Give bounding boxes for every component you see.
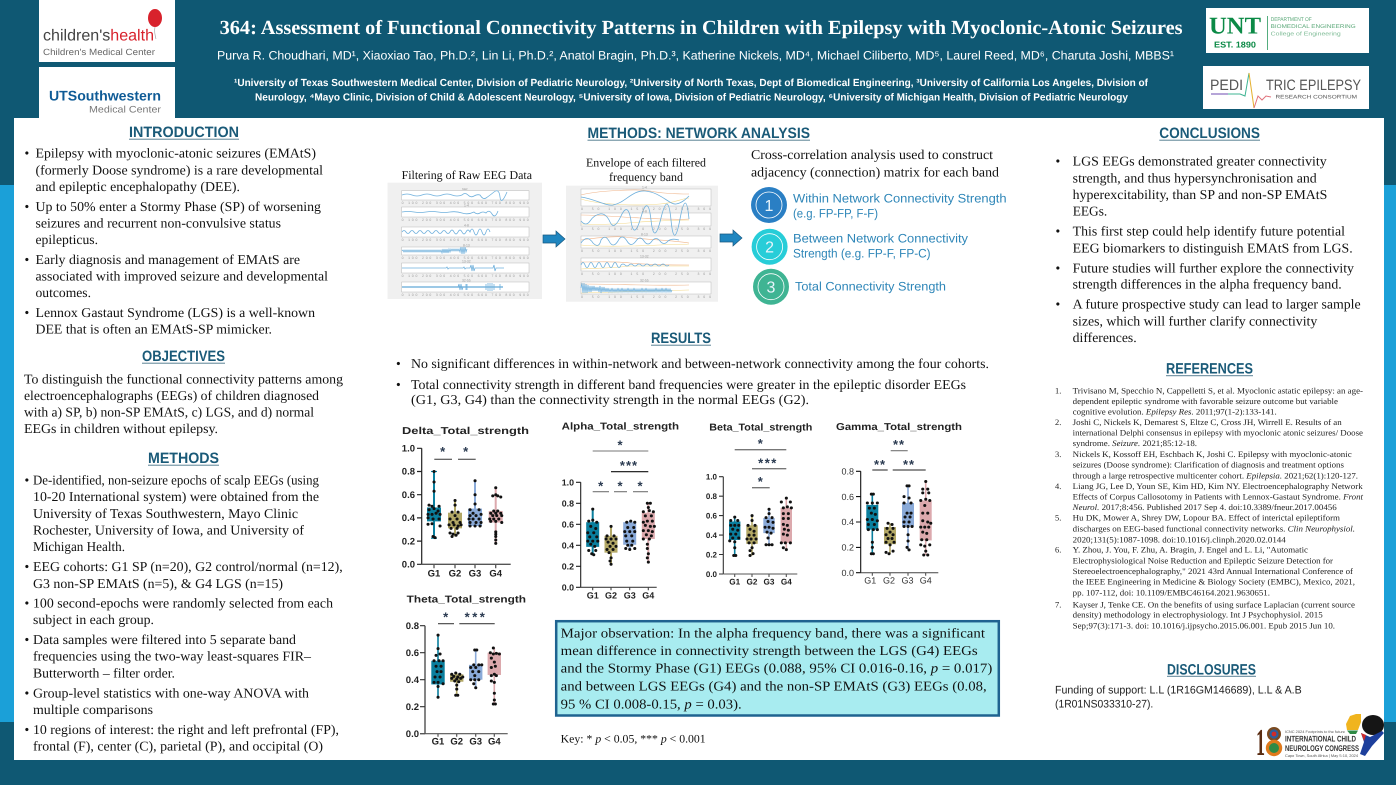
box G4 bbox=[488, 648, 501, 704]
panel: conclusions bbox=[1056, 125, 1361, 345]
logo: International Child Neurology Congress: ICNC 2024 Footprints to the future bbox=[1285, 730, 1345, 734]
chart: alpha total strength: 0.8 bbox=[562, 498, 574, 508]
results bullets: Total connectivity strength in different band frequencies were greater in the epileptic disorder EEGs bbox=[411, 377, 966, 392]
logo: UT Southwestern: UTSouthwestern bbox=[49, 88, 161, 104]
reference list: Sep;97(3):171-3. doi: 10.1016/j.ijpsycho.2015.06.001. Epub 2015 Jun 10. bbox=[1073, 621, 1335, 630]
panel: objectives bbox=[24, 348, 343, 436]
methods bullets: • bbox=[24, 722, 29, 737]
chart: theta total strength: Theta_Total_strength bbox=[407, 594, 526, 605]
methods bullets: • bbox=[24, 559, 29, 574]
panel: methods network analysis bbox=[388, 125, 1007, 305]
heading: introduction: INTRODUCTION bbox=[129, 124, 239, 141]
results bullets: No significant differences in within-network and between-network connectivity among the four cohorts. bbox=[411, 356, 989, 371]
conclusions bullets: • bbox=[1056, 224, 1060, 239]
chart: theta total strength: 0.6 bbox=[406, 648, 419, 659]
chart: filtered raw EEG traces: 32-55 bbox=[462, 278, 471, 282]
chart: delta total strength: G1 bbox=[428, 569, 441, 580]
funding text: Funding of support: L.L (1R16GM146689), L.L & A.B bbox=[1055, 684, 1302, 696]
conclusions bullets: differences. bbox=[1073, 330, 1137, 345]
reference list: 4. bbox=[1055, 482, 1061, 491]
chart: theta total strength: G4 bbox=[488, 737, 501, 748]
chart: theta total strength: G3 bbox=[469, 737, 482, 748]
affiliations bbox=[234, 78, 1149, 104]
logo: UNT: UNT bbox=[1209, 13, 1261, 39]
chart: gamma total strength: 0.6 bbox=[841, 492, 854, 502]
heading: methods network analysis: METHODS: NETWORK ANALYSIS bbox=[588, 125, 810, 142]
intro bullets: and epileptic encephalopathy (DEE). bbox=[36, 179, 240, 194]
chart: alpha total strength: *** bbox=[620, 458, 638, 473]
callout: major observation: 95 % CI 0.008-0.15, p = 0.03). bbox=[561, 696, 742, 711]
chart: envelope of each band: 4-8 bbox=[642, 210, 647, 214]
chart: alpha total strength: 0.2 bbox=[562, 561, 574, 571]
chart: theta total strength: G2 bbox=[450, 737, 463, 748]
reference list: 7. bbox=[1055, 600, 1061, 609]
methods bullets: • bbox=[24, 686, 29, 701]
chart: beta total strength: *** bbox=[758, 456, 778, 470]
box G1 bbox=[729, 517, 740, 556]
reference list: the IEEE Engineering in Medicine & Biology Society (EMBC), Mexico, 2021, bbox=[1073, 578, 1355, 587]
chart: delta total strength: G2 bbox=[449, 569, 461, 580]
reference list: 3. bbox=[1055, 450, 1061, 459]
conclusions bullets: A future prospective study can lead to larger sample bbox=[1073, 297, 1361, 312]
chart: beta total strength: 0.6 bbox=[706, 511, 718, 520]
box G1 bbox=[427, 471, 441, 539]
reference list: through a large retrospective multicenter cohort. Epilepsia. 2021;62(1):120-127. bbox=[1073, 471, 1358, 480]
item 2: between network: 2 bbox=[765, 240, 774, 257]
methods bullets: Michigan Health. bbox=[33, 539, 125, 554]
methods bullets: frontal (F), center (C), parietal (P), and occipital (O) bbox=[33, 739, 323, 754]
conclusions bullets: EEGs. bbox=[1073, 204, 1107, 219]
chart: beta total strength bbox=[706, 423, 812, 587]
logo: Children's Health bbox=[39, 0, 175, 62]
chart: delta total strength: 1.0 bbox=[402, 444, 415, 454]
chart: alpha total strength: * bbox=[598, 478, 604, 494]
heading: objectives: OBJECTIVES bbox=[142, 348, 225, 365]
panel: results bbox=[396, 330, 999, 748]
intro bullets: Epilepsy with myoclonic-atonic seizures (EMAtS) bbox=[36, 146, 316, 161]
methods bullets: frequencies using the two-way least-squares FIR– bbox=[33, 649, 311, 664]
methods bullets: G3 non-SP EMAtS (n=5), & G4 LGS (n=15) bbox=[33, 576, 283, 591]
logo: UNT: College of Engineering bbox=[1271, 30, 1341, 37]
item 1: within network: Within Network Connectivity Strength bbox=[793, 192, 1007, 206]
chart: beta total strength: 0.0 bbox=[706, 570, 718, 579]
caption: envelope: Envelope of each filtered bbox=[586, 156, 706, 170]
methods bullets: subject in each group. bbox=[33, 612, 154, 627]
methods bullets: University of Texas Southwestern, Mayo Clinic bbox=[33, 506, 298, 521]
box G2 bbox=[448, 500, 462, 536]
chart: envelope of each band: 0 50 100 150 200 250 300 bbox=[581, 207, 711, 211]
conclusions bullets: This first step could help identify future potential bbox=[1073, 224, 1345, 239]
chart: gamma total strength: ** bbox=[874, 457, 886, 472]
chart: delta total strength: 0.6 bbox=[402, 490, 415, 501]
chart: gamma total strength: G3 bbox=[901, 575, 914, 585]
reference list: 6. bbox=[1055, 546, 1061, 555]
caption: filtering: Filtering of Raw EEG Data bbox=[402, 168, 533, 182]
intro bullets: outcomes. bbox=[36, 285, 91, 300]
chart: gamma total strength: 0.8 bbox=[841, 466, 854, 476]
caption: cross-correlation: Cross-correlation analysis used to construct bbox=[751, 147, 993, 162]
chart: envelope of each band bbox=[566, 186, 718, 302]
chart: beta total strength: G1 bbox=[729, 578, 741, 587]
intro bullets: epilepticus. bbox=[36, 232, 98, 247]
chart: gamma total strength: 0.2 bbox=[841, 543, 854, 553]
chart: delta total strength: * bbox=[440, 444, 446, 459]
chart: alpha total strength: 1.0 bbox=[562, 477, 574, 487]
results bullets: • bbox=[396, 377, 401, 392]
box G1 bbox=[431, 635, 445, 697]
chart: beta total strength: 0.2 bbox=[706, 550, 718, 559]
reference list: Neurol. 2017;8:456. Published 2017 Sep 4. doi:10.3389/fneur.2017.00456 bbox=[1072, 503, 1337, 512]
item 3: total connectivity bbox=[753, 269, 946, 305]
chart: beta total strength: * bbox=[758, 474, 764, 489]
reference list: 5. bbox=[1055, 514, 1061, 523]
conclusions bullets: EEG biomarkers to distinguish EMAtS from LGS. bbox=[1073, 240, 1353, 255]
chart: gamma total strength: G4 bbox=[920, 575, 932, 585]
chart: gamma total strength bbox=[836, 422, 962, 585]
logo: International Child Neurology Congress: NEUROLOGY CONGRESS bbox=[1285, 744, 1359, 753]
logo: International Child Neurology Congress: 1 bbox=[1256, 722, 1265, 764]
intro bullets: • bbox=[24, 305, 29, 320]
conclusions bullets: sizes, which will further clarify connectivity bbox=[1073, 313, 1318, 328]
conclusions bullets: strength differences in the alpha frequency band. bbox=[1073, 277, 1342, 292]
chart: alpha total strength: G2 bbox=[605, 591, 617, 601]
chart: beta total strength: 0.4 bbox=[706, 531, 718, 540]
reference list: Liang JG, Lee D, Youn SE, Kim HD, Kim NY. Electroencephalography Network bbox=[1073, 482, 1364, 491]
chart: envelope of each band: 0 50 100 150 200 250 300 bbox=[581, 272, 711, 276]
reference list: syndrome. Seizure. 2021;85:12-18. bbox=[1073, 439, 1197, 448]
logo: Children's Health: children'shealth bbox=[43, 28, 154, 45]
chart: filtered raw EEG traces bbox=[388, 183, 542, 299]
box G3 bbox=[902, 486, 914, 550]
box G2 bbox=[884, 523, 896, 554]
chart: filtered raw EEG traces: 0 100 200 300 400 500 600 700 800 900 bbox=[402, 238, 529, 242]
chart: filtered raw EEG traces: 0 100 200 300 400 500 600 700 800 900 bbox=[402, 218, 529, 222]
logo: International Child Neurology Congress: INTERNATIONAL CHILD bbox=[1285, 735, 1356, 744]
chart: alpha total strength bbox=[562, 421, 679, 601]
intro bullets: Early diagnosis and management of EMAtS are bbox=[36, 252, 300, 267]
chart: alpha total strength: G1 bbox=[587, 591, 599, 601]
chart: delta total strength: 0.2 bbox=[402, 536, 415, 547]
logo: International Child Neurology Congress bbox=[1256, 714, 1384, 764]
results bullets: (G1, G3, G4) than the connectivity strength in the normal EEGs (G2). bbox=[411, 392, 809, 407]
chart: theta total strength: 0.8 bbox=[406, 621, 419, 632]
logo: Pediatric Epilepsy Research Consortium: TRIC EPILEPSY bbox=[1266, 77, 1361, 94]
heading: references: REFERENCES bbox=[1166, 361, 1253, 378]
chart: filtered raw EEG traces: 1-4 bbox=[464, 204, 469, 208]
caption: envelope bbox=[586, 156, 706, 184]
chart: filtered raw EEG traces: 4-8 bbox=[464, 224, 469, 228]
chart: delta total strength bbox=[402, 426, 529, 580]
conclusions bullets: Future studies will further explore the connectivity bbox=[1073, 260, 1354, 275]
chart: theta total strength: G1 bbox=[432, 737, 445, 748]
caption: cross-correlation bbox=[751, 147, 999, 180]
logo: UNT: EST. 1890 bbox=[1214, 40, 1256, 50]
chart: alpha total strength: * bbox=[617, 478, 623, 494]
methods bullets: 10-20 International system) were obtained from the bbox=[33, 489, 319, 504]
chart: alpha total strength: G3 bbox=[624, 591, 636, 601]
logo: Children's Health: Children's Medical Center bbox=[43, 47, 155, 57]
logo: UNT: BIOMEDICAL ENGINEERING bbox=[1271, 24, 1356, 30]
reference list: Stereoelectroencephalography," 2021 43rd Annual International Conference of bbox=[1073, 567, 1353, 576]
objectives text bbox=[24, 372, 343, 436]
reference list: Joshi C, Nickels K, Demarest S, Eltze C, Cross JH, Wirrell E. Results of an bbox=[1073, 418, 1343, 427]
chart: gamma total strength: ** bbox=[893, 437, 905, 452]
panel: methods bbox=[24, 450, 343, 754]
intro bullets: • bbox=[24, 199, 29, 214]
reference list bbox=[1055, 386, 1364, 630]
intro bullets bbox=[24, 146, 328, 337]
chart: alpha total strength: * bbox=[637, 478, 643, 494]
chart: alpha total strength: 0.4 bbox=[562, 540, 574, 550]
chart: delta total strength: G3 bbox=[469, 569, 481, 580]
callout: major observation: Major observation: In the alpha frequency band, there was a significant bbox=[561, 626, 985, 641]
chart: beta total strength: 1.0 bbox=[706, 472, 718, 482]
reference list: cognitive evolution. Epilepsy Res. 2011;97(1-2):133-141. bbox=[1073, 407, 1277, 416]
box G4 bbox=[781, 498, 792, 551]
item 2: between network: Between Network Connectivity bbox=[793, 232, 969, 246]
heading: results: RESULTS bbox=[651, 330, 711, 347]
reference list: dependent epileptic syndrome with favorable seizure outcome but variable bbox=[1073, 397, 1338, 406]
chart: envelope of each band: 0 50 100 150 200 250 300 bbox=[581, 227, 711, 231]
methods bullets: 10 regions of interest: the right and left prefrontal (FP), bbox=[33, 722, 339, 737]
objectives text: To distinguish the functional connectivity patterns among bbox=[24, 372, 343, 386]
methods bullets: 100 second-epochs were randomly selected from each bbox=[33, 596, 333, 611]
logo: International Child Neurology Congress: Cape Town, South Africa | May 5-10, 2024 bbox=[1285, 754, 1358, 758]
methods bullets: Butterworth – filter order. bbox=[33, 666, 175, 681]
methods bullets: • bbox=[24, 596, 29, 611]
reference list: 1. bbox=[1055, 386, 1061, 395]
box G3 bbox=[469, 650, 482, 688]
box G3 bbox=[468, 481, 482, 526]
reference list: international Delphi consensus in epilepsy with myoclonic atonic seizures/ Doose bbox=[1073, 429, 1363, 438]
reference list: Y. Zhou, J. You, F. Zhu, A. Bragin, J. Engel and L. Li, "Automatic bbox=[1073, 546, 1308, 555]
chart: envelope of each band: 0 50 100 150 200 250 300 bbox=[581, 295, 711, 299]
chart: delta total strength: 0.4 bbox=[402, 513, 416, 524]
chart: gamma total strength: 0.0 bbox=[841, 568, 854, 578]
callout: major observation bbox=[556, 621, 999, 716]
box G2 bbox=[746, 516, 758, 556]
caption: envelope: frequency band bbox=[609, 170, 683, 184]
objectives text: EEGs in children without epilepsy. bbox=[24, 421, 218, 436]
chart: delta total strength: 0.0 bbox=[402, 560, 415, 570]
chart: envelope of each band: 1-4 bbox=[642, 186, 647, 190]
reference list: pp. 107-112, doi: 10.1109/EMBC46164.2021.9630651. bbox=[1073, 588, 1270, 597]
chart: alpha total strength: * bbox=[617, 438, 623, 452]
box G1 bbox=[866, 494, 878, 554]
methods bullets bbox=[24, 473, 343, 754]
chart: beta total strength: G3 bbox=[764, 578, 775, 587]
item 1: within network: 1 bbox=[765, 198, 774, 215]
header banner bbox=[39, 0, 1369, 118]
panel: introduction bbox=[24, 124, 328, 337]
caption: cross-correlation: adjacency (connection) matrix for each band bbox=[751, 165, 999, 180]
arrow: filtering to envelope bbox=[543, 231, 565, 247]
intro bullets: Up to 50% enter a Stormy Phase (SP) of worsening bbox=[36, 199, 321, 214]
logo: Pediatric Epilepsy Research Consortium bbox=[1203, 66, 1369, 109]
intro bullets: • bbox=[24, 252, 29, 267]
results bullets bbox=[396, 356, 989, 407]
chart: envelope of each band: 13-32 bbox=[640, 254, 649, 258]
reference list: 2020;131(5):1087-1098. doi:10.1016/j.clinph.2020.02.0144 bbox=[1073, 535, 1287, 544]
chart: alpha total strength: 0.6 bbox=[562, 519, 574, 529]
chart: beta total strength: 0.8 bbox=[706, 492, 718, 501]
chart: filtered raw EEG traces: 0 100 200 300 400 500 600 700 800 900 bbox=[402, 201, 529, 205]
chart: beta total strength: Beta_Total_strength bbox=[709, 423, 812, 434]
reference list: 2. bbox=[1055, 418, 1061, 427]
heading: conclusions: CONCLUSIONS bbox=[1159, 125, 1260, 142]
intro bullets: • bbox=[24, 146, 29, 161]
chart: delta total strength: * bbox=[463, 444, 469, 459]
arrow: envelope to correlation bbox=[720, 230, 742, 246]
chart: alpha total strength: G4 bbox=[642, 591, 654, 601]
logo: Pediatric Epilepsy Research Consortium: PEDI bbox=[1210, 77, 1243, 94]
logo: UNT bbox=[1206, 8, 1369, 53]
box G4 bbox=[489, 488, 503, 543]
chart: delta total strength: Delta_Total_strength bbox=[402, 426, 529, 437]
chart: beta total strength: * bbox=[758, 436, 764, 451]
reference list: Effects of Corpus Callosotomy in Patients with Lennox-Gastaut Syndrome. Front bbox=[1073, 492, 1364, 501]
chart: envelope of each band: 8-13 bbox=[641, 232, 648, 236]
conclusions bullets: LGS EEGs demonstrated greater connectivity bbox=[1073, 154, 1327, 169]
chart: delta total strength: G4 bbox=[489, 569, 503, 580]
objectives text: electroencephalographs (EEGs) of children diagnosed bbox=[24, 388, 319, 403]
chart: filtered raw EEG traces: 8-13 bbox=[463, 244, 470, 248]
item 3: total connectivity: Total Connectivity Strength bbox=[795, 280, 946, 294]
intro bullets: (formerly Doose syndrome) is a rare developmental bbox=[36, 162, 323, 177]
chart: beta total strength: G2 bbox=[747, 578, 758, 587]
reference list: Kayser J, Tenke CE. On the benefits of using surface Laplacian (current source bbox=[1073, 600, 1355, 609]
chart: beta total strength: G4 bbox=[781, 578, 792, 587]
key: Key: * p < 0.05, *** p < 0.001 bbox=[561, 733, 706, 745]
chart: filtered raw EEG traces: raw bbox=[462, 187, 468, 191]
chart: alpha total strength: Alpha_Total_strength bbox=[562, 421, 679, 432]
conclusions bullets: hyperexcitability, than SP and non-SP EMAtS bbox=[1073, 187, 1327, 202]
funding text bbox=[1055, 684, 1302, 710]
chart: envelope of each band: 0 50 100 150 200 250 300 bbox=[581, 249, 711, 253]
conclusions bullets: strength, and thus hypersynchronisation and bbox=[1073, 170, 1317, 185]
methods bullets: De-identified, non-seizure epochs of scalp EEGs (using bbox=[33, 473, 319, 488]
box G4 bbox=[920, 481, 932, 555]
chart: theta total strength: 0.0 bbox=[406, 729, 419, 740]
chart: delta total strength: 0.8 bbox=[402, 467, 415, 478]
reference list: density) methodology in electrophysiology. Int J Psychophysiol. 2015 bbox=[1073, 611, 1323, 620]
reference list: Trivisano M, Specchio N, Cappelletti S, et al. Myoclonic astatic epilepsy: an age- bbox=[1073, 386, 1363, 395]
reference list: discharges on EEG-based functional connectivity networks. Clin Neurophysiol. bbox=[1073, 525, 1355, 534]
methods bullets: EEG cohorts: G1 SP (n=20), G2 control/normal (n=12), bbox=[33, 559, 343, 574]
box G3 bbox=[623, 521, 636, 550]
item 2: between network bbox=[752, 229, 969, 265]
chart: filtered raw EEG traces: 0 100 200 300 400 500 600 700 800 900 bbox=[402, 274, 529, 278]
funding text: (1R01NS033310-27). bbox=[1055, 698, 1153, 710]
conclusions bullets bbox=[1056, 154, 1361, 345]
methods bullets: • bbox=[24, 473, 29, 488]
reference list: Nickels K, Kossoff EH, Eschbach K, Joshi C. Epilepsy with myoclonic-atonic bbox=[1073, 450, 1352, 459]
chart: filtered raw EEG traces: 0 100 200 300 400 500 600 700 800 900 bbox=[402, 293, 529, 297]
chart: theta total strength: 0.2 bbox=[406, 702, 419, 713]
methods bullets: multiple comparisons bbox=[33, 702, 153, 717]
conclusions bullets: • bbox=[1056, 154, 1060, 169]
methods bullets: Group-level statistics with one-way ANOVA with bbox=[33, 686, 309, 701]
conclusions bullets: • bbox=[1056, 260, 1060, 275]
methods bullets: Rochester, University of Iowa, and University of bbox=[33, 522, 305, 537]
box G4 bbox=[642, 503, 655, 562]
logo: UT Southwestern: Medical Center bbox=[89, 105, 161, 116]
intro bullets: DEE that is often an EMAtS-SP mimicker. bbox=[36, 322, 272, 337]
chart: gamma total strength: G2 bbox=[883, 575, 895, 585]
item 2: between network: Strength (e.g. FP-F, FP-C) bbox=[793, 246, 931, 260]
box G3 bbox=[763, 509, 775, 545]
heading: disclosures: DISCLOSURES bbox=[1167, 661, 1256, 678]
box G2 bbox=[450, 673, 463, 695]
item 1: within network bbox=[751, 187, 1007, 223]
intro bullets: Lennox Gastaut Syndrome (LGS) is a well-known bbox=[36, 305, 315, 320]
reference list: Hu DK, Mower A, Shrey DW, Lopour BA. Effect of interictal epileptiform bbox=[1073, 514, 1341, 523]
authors: Purva R. Choudhari, MD¹, Xiaoxiao Tao, Ph.D.², Lin Li, Ph.D.², Anatol Bragin, Ph.D.³, Katherine Nickels, MD⁴, Michael Ciliberto, MD⁵, Laurel Reed, MD⁶, Charuta Joshi, MBBS¹ bbox=[217, 48, 1174, 62]
logo: UT Southwestern bbox=[39, 67, 175, 118]
chart: gamma total strength: ** bbox=[903, 457, 915, 472]
logo: UNT: DEPARTMENT OF bbox=[1271, 17, 1312, 23]
reference list: seizures (Doose syndrome): Clarification of diagnosis and treatment options bbox=[1073, 461, 1344, 470]
item 1: within network: (e.g. FP-FP, F-F) bbox=[793, 207, 878, 221]
chart: theta total strength bbox=[406, 594, 526, 748]
panel: references bbox=[1055, 361, 1364, 630]
results bullets: • bbox=[396, 356, 401, 371]
chart: filtered raw EEG traces: 13-32 bbox=[462, 260, 471, 264]
chart: envelope of each band: 32-55 bbox=[640, 278, 649, 282]
chart: gamma total strength: G1 bbox=[864, 575, 876, 585]
intro bullets: associated with improved seizure and developmental bbox=[36, 269, 328, 284]
intro bullets: seizures and recurrent non-convulsive status bbox=[36, 216, 281, 231]
chart: gamma total strength: 0.4 bbox=[841, 517, 854, 527]
affiliations: ¹University of Texas Southwestern Medical Center, Division of Pediatric Neurology, ²University of North Texas, Dept of Biomedical Engineering, ³University of California Los Angeles, Division of bbox=[234, 78, 1149, 89]
chart: theta total strength: *** bbox=[465, 610, 487, 624]
callout: major observation: and between LGS EEGs (G4) and the non-SP EMAtS (G3) EEGs (0.08, bbox=[561, 679, 987, 694]
conclusions bullets: • bbox=[1056, 297, 1060, 312]
affiliations: Neurology, ⁴Mayo Clinic, Division of Child & Adolescent Neurology, ⁵University of Iowa, Division of Pediatric Neurology, ⁶University of Michigan Health, Division of Pediatric Neurology bbox=[255, 93, 1128, 104]
objectives text: with a) SP, b) non-SP EMAtS, c) LGS, and d) normal bbox=[24, 404, 314, 420]
box G2 bbox=[604, 526, 618, 564]
panel: disclosures bbox=[1055, 661, 1302, 710]
heading: methods: METHODS bbox=[148, 450, 219, 467]
title: 364: Assessment of Functional Connectivity Patterns in Children with Epilepsy with Myoclonic-Atonic Seizures bbox=[220, 17, 1183, 39]
logo: Pediatric Epilepsy Research Consortium: RESEARCH CONSORTIUM bbox=[1276, 94, 1357, 100]
methods bullets: Data samples were filtered into 5 separate band bbox=[33, 632, 296, 647]
chart: gamma total strength: Gamma_Total_strength bbox=[836, 422, 962, 433]
chart: filtered raw EEG traces: 0 100 200 300 400 500 600 700 800 900 bbox=[402, 256, 529, 260]
reference list: Electrophysiological Noise Reduction and Epileptic Seizure Detection for bbox=[1073, 556, 1333, 565]
chart: theta total strength: * bbox=[443, 610, 449, 624]
chart: alpha total strength: 0.0 bbox=[562, 582, 574, 592]
item 3: total connectivity: 3 bbox=[767, 280, 776, 297]
box G1 bbox=[586, 509, 599, 555]
chart: theta total strength: 0.4 bbox=[406, 675, 420, 686]
callout: major observation: and the Stormy Phase (G1) EEGs (0.088, 95% CI 0.016-0.16, p = 0.017) bbox=[561, 661, 992, 676]
methods bullets: • bbox=[24, 632, 29, 647]
callout: major observation: mean difference in connectivity strength between the LGS (G4) EEGs bbox=[561, 643, 978, 658]
